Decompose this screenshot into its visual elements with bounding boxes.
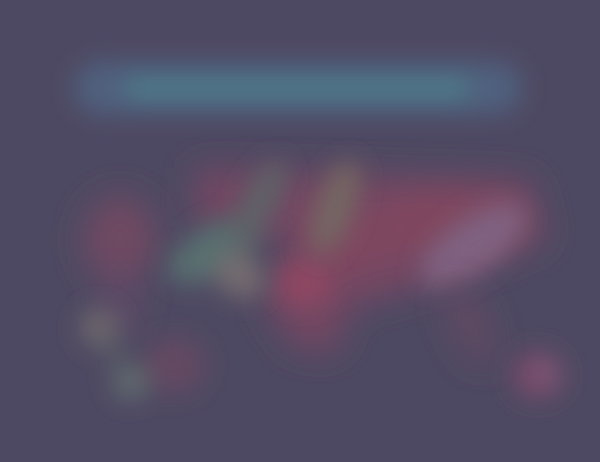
map region: south-east tail [438,280,502,370]
map hotspot: olive diagonal band [300,155,370,261]
map hotspot: pink band east [407,188,539,302]
map hotspot: central red [277,259,333,307]
map hotspot: south-west blobs [80,308,205,400]
map hotspot: far south-east [512,351,564,399]
map region: central land mass [195,168,546,352]
map hotspot: green diagonal band west [158,153,296,307]
title banner [74,62,522,114]
map region: western land mass [84,196,156,336]
